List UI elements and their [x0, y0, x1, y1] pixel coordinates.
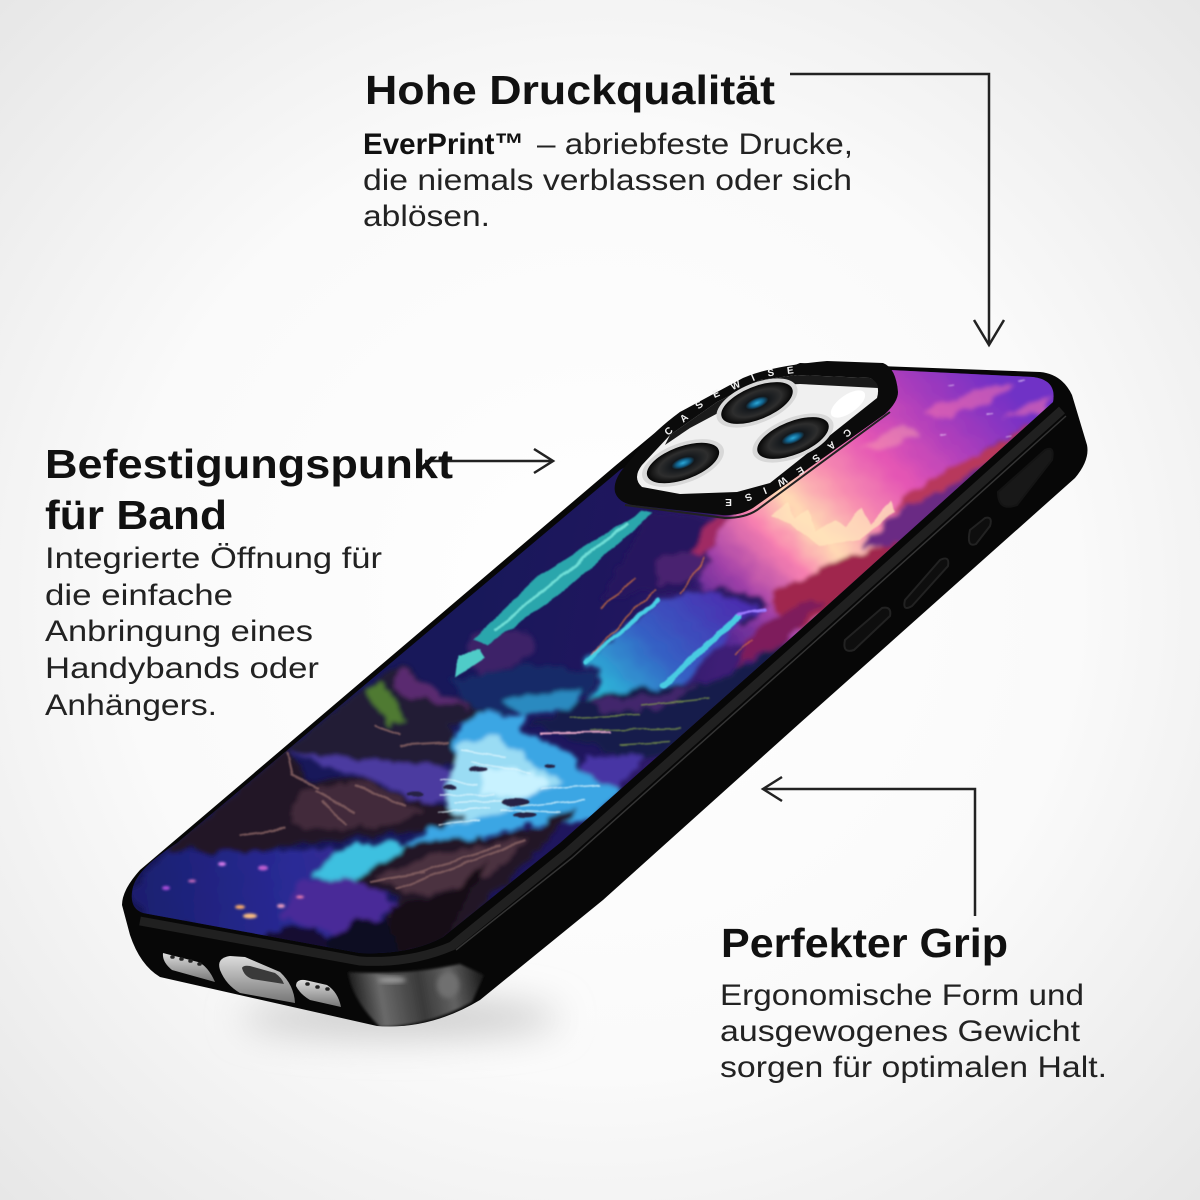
text: strap description: Anhängers.	[45, 689, 217, 722]
island ring	[615, 361, 898, 515]
river bright centre	[445, 735, 565, 825]
arrow: strap attachment	[425, 449, 553, 473]
glowing water lights	[162, 862, 304, 918]
rock highlights	[240, 725, 525, 890]
bank highlights	[570, 698, 710, 745]
upper waterfall	[472, 512, 652, 645]
camera window	[637, 375, 878, 494]
moss	[365, 680, 405, 728]
red foliage	[772, 542, 905, 630]
text: EverPrint description: die niemals verblassen oder sich	[363, 164, 852, 197]
side buttons	[844, 449, 1053, 651]
artwork: fantasy landscape	[120, 350, 1080, 970]
phone drop shadow	[240, 998, 560, 1038]
pink clouds	[925, 385, 1015, 420]
violet water band	[287, 752, 470, 805]
flash	[826, 385, 870, 423]
text: EverPrint description: – abriebfeste Drucke,	[537, 128, 853, 161]
corner gloss	[348, 964, 484, 1027]
heading: Hohe Druckqualität: Hohe Druckqualität	[365, 67, 775, 113]
dark ledge	[450, 665, 600, 712]
callout: strap attachment	[45, 441, 453, 722]
water glints	[438, 750, 600, 825]
case body	[122, 363, 1088, 1026]
mid rocks	[167, 750, 468, 852]
heading: Befestigungspunkt für Band: für Band	[45, 492, 227, 538]
river stones	[406, 763, 556, 818]
text: strap description	[45, 542, 382, 722]
arrow: grip	[763, 777, 975, 916]
text: grip description: ausgewogenes Gewicht	[720, 1015, 1081, 1048]
sunset sky	[696, 370, 1054, 648]
right mountains	[860, 423, 1029, 552]
crisp painted details	[240, 380, 1024, 890]
artwork base	[120, 360, 1080, 970]
callout: grip	[720, 920, 1107, 1084]
text: grip description: sorgen für optimalen Halt.	[720, 1051, 1107, 1084]
ring lip	[625, 412, 890, 518]
small teal cascade	[455, 650, 485, 678]
bottom water	[130, 848, 397, 955]
purple cliffs	[600, 512, 725, 600]
port: left speaker	[163, 953, 215, 982]
phone case	[122, 361, 1088, 1026]
upper cliff rocks	[287, 665, 495, 766]
purple bush	[468, 629, 536, 675]
lower falls basin	[578, 590, 765, 706]
lens 1	[710, 368, 804, 438]
text: strap description: Integrierte Öffnung für	[45, 542, 382, 575]
river	[395, 712, 622, 858]
text: EverPrint description: EverPrint™	[363, 128, 524, 161]
soft painted layer	[130, 350, 1075, 962]
brand text lower: CASEWISE	[726, 430, 851, 506]
inner wall shadow	[665, 375, 878, 445]
side rim highlight	[140, 410, 1066, 961]
heading: Befestigungspunkt für Band	[45, 441, 453, 538]
cascade	[312, 842, 410, 882]
callout: print quality	[363, 67, 853, 233]
heading: Befestigungspunkt für Band: Befestigungspunkt	[45, 441, 453, 487]
port: USB-C	[219, 956, 295, 1003]
dark foreground	[386, 862, 487, 951]
violet shallows right	[575, 755, 645, 815]
arrow: print quality	[790, 74, 1004, 345]
sky stars	[940, 380, 1024, 438]
jagged horizon	[772, 500, 895, 545]
far right bank	[530, 640, 790, 762]
orange cliff lines	[590, 558, 752, 655]
text: grip description: Ergonomische Form und	[720, 979, 1084, 1012]
text: strap description: Handybands oder	[45, 652, 319, 685]
heading: Perfekter Grip: Perfekter Grip	[721, 920, 1008, 966]
brand text upper: CASEWISE	[665, 366, 794, 434]
text: strap description: die einfache	[45, 579, 233, 612]
text: grip description	[720, 979, 1107, 1084]
text: EverPrint description: ablösen.	[363, 200, 490, 233]
text: strap description: Anbringung eines	[45, 615, 313, 648]
port: right speaker	[296, 980, 341, 1007]
bottom right rocks	[352, 806, 578, 951]
text: EverPrint description	[363, 128, 853, 233]
camera island	[614, 361, 898, 519]
lens 3	[636, 429, 730, 497]
lens 2	[746, 403, 840, 473]
waterfall streaks	[585, 600, 765, 686]
